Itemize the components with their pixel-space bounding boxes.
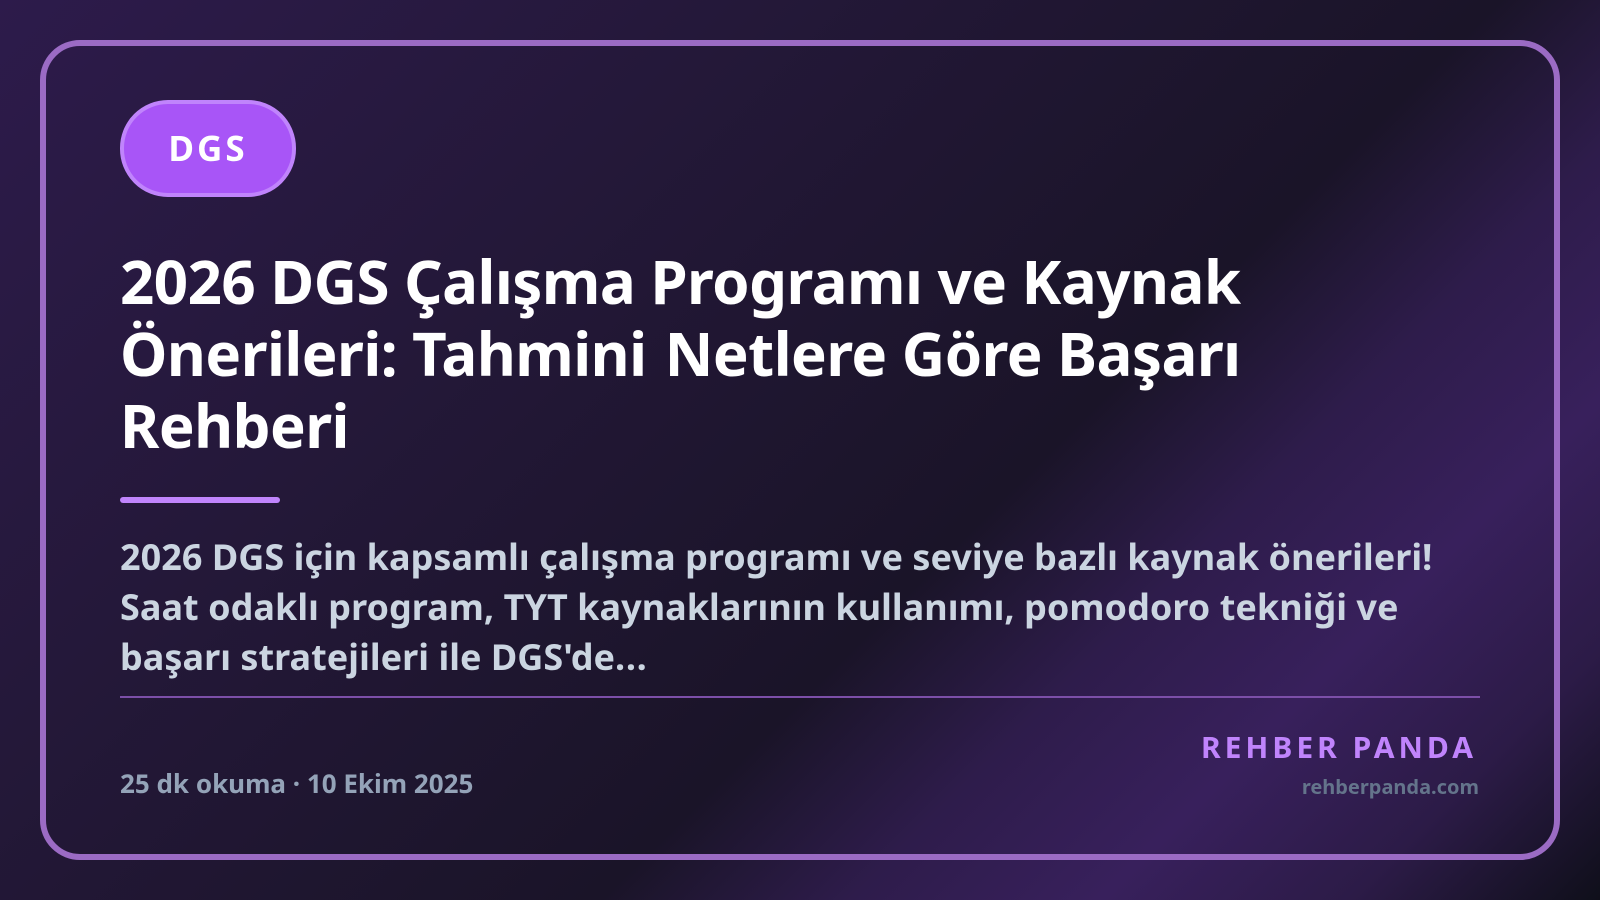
reading time and date: 25 dk okuma · 10 Ekim 2025 (120, 765, 473, 801)
category badge: DGS (168, 125, 248, 172)
category badge (120, 100, 296, 197)
title: Önerileri: Tahmini Netlere Göre Başarı (120, 312, 1241, 394)
description: 2026 DGS için kapsamlı çalışma programı ve seviye bazlı kaynak önerileri! (120, 532, 1432, 581)
description: başarı stratejileri ile DGS'de... (120, 632, 647, 681)
description (120, 532, 1432, 681)
site url: rehberpanda.com (1302, 773, 1479, 800)
title: 2026 DGS Çalışma Programı ve Kaynak (120, 240, 1241, 322)
accent bar (120, 497, 280, 503)
title: Rehberi (120, 384, 349, 466)
title (120, 240, 1241, 466)
description: Saat odaklı program, TYT kaynaklarının kullanımı, pomodoro tekniği ve (120, 582, 1399, 631)
footer rule (120, 696, 1480, 698)
brand name: REHBER PANDA (1201, 726, 1477, 767)
